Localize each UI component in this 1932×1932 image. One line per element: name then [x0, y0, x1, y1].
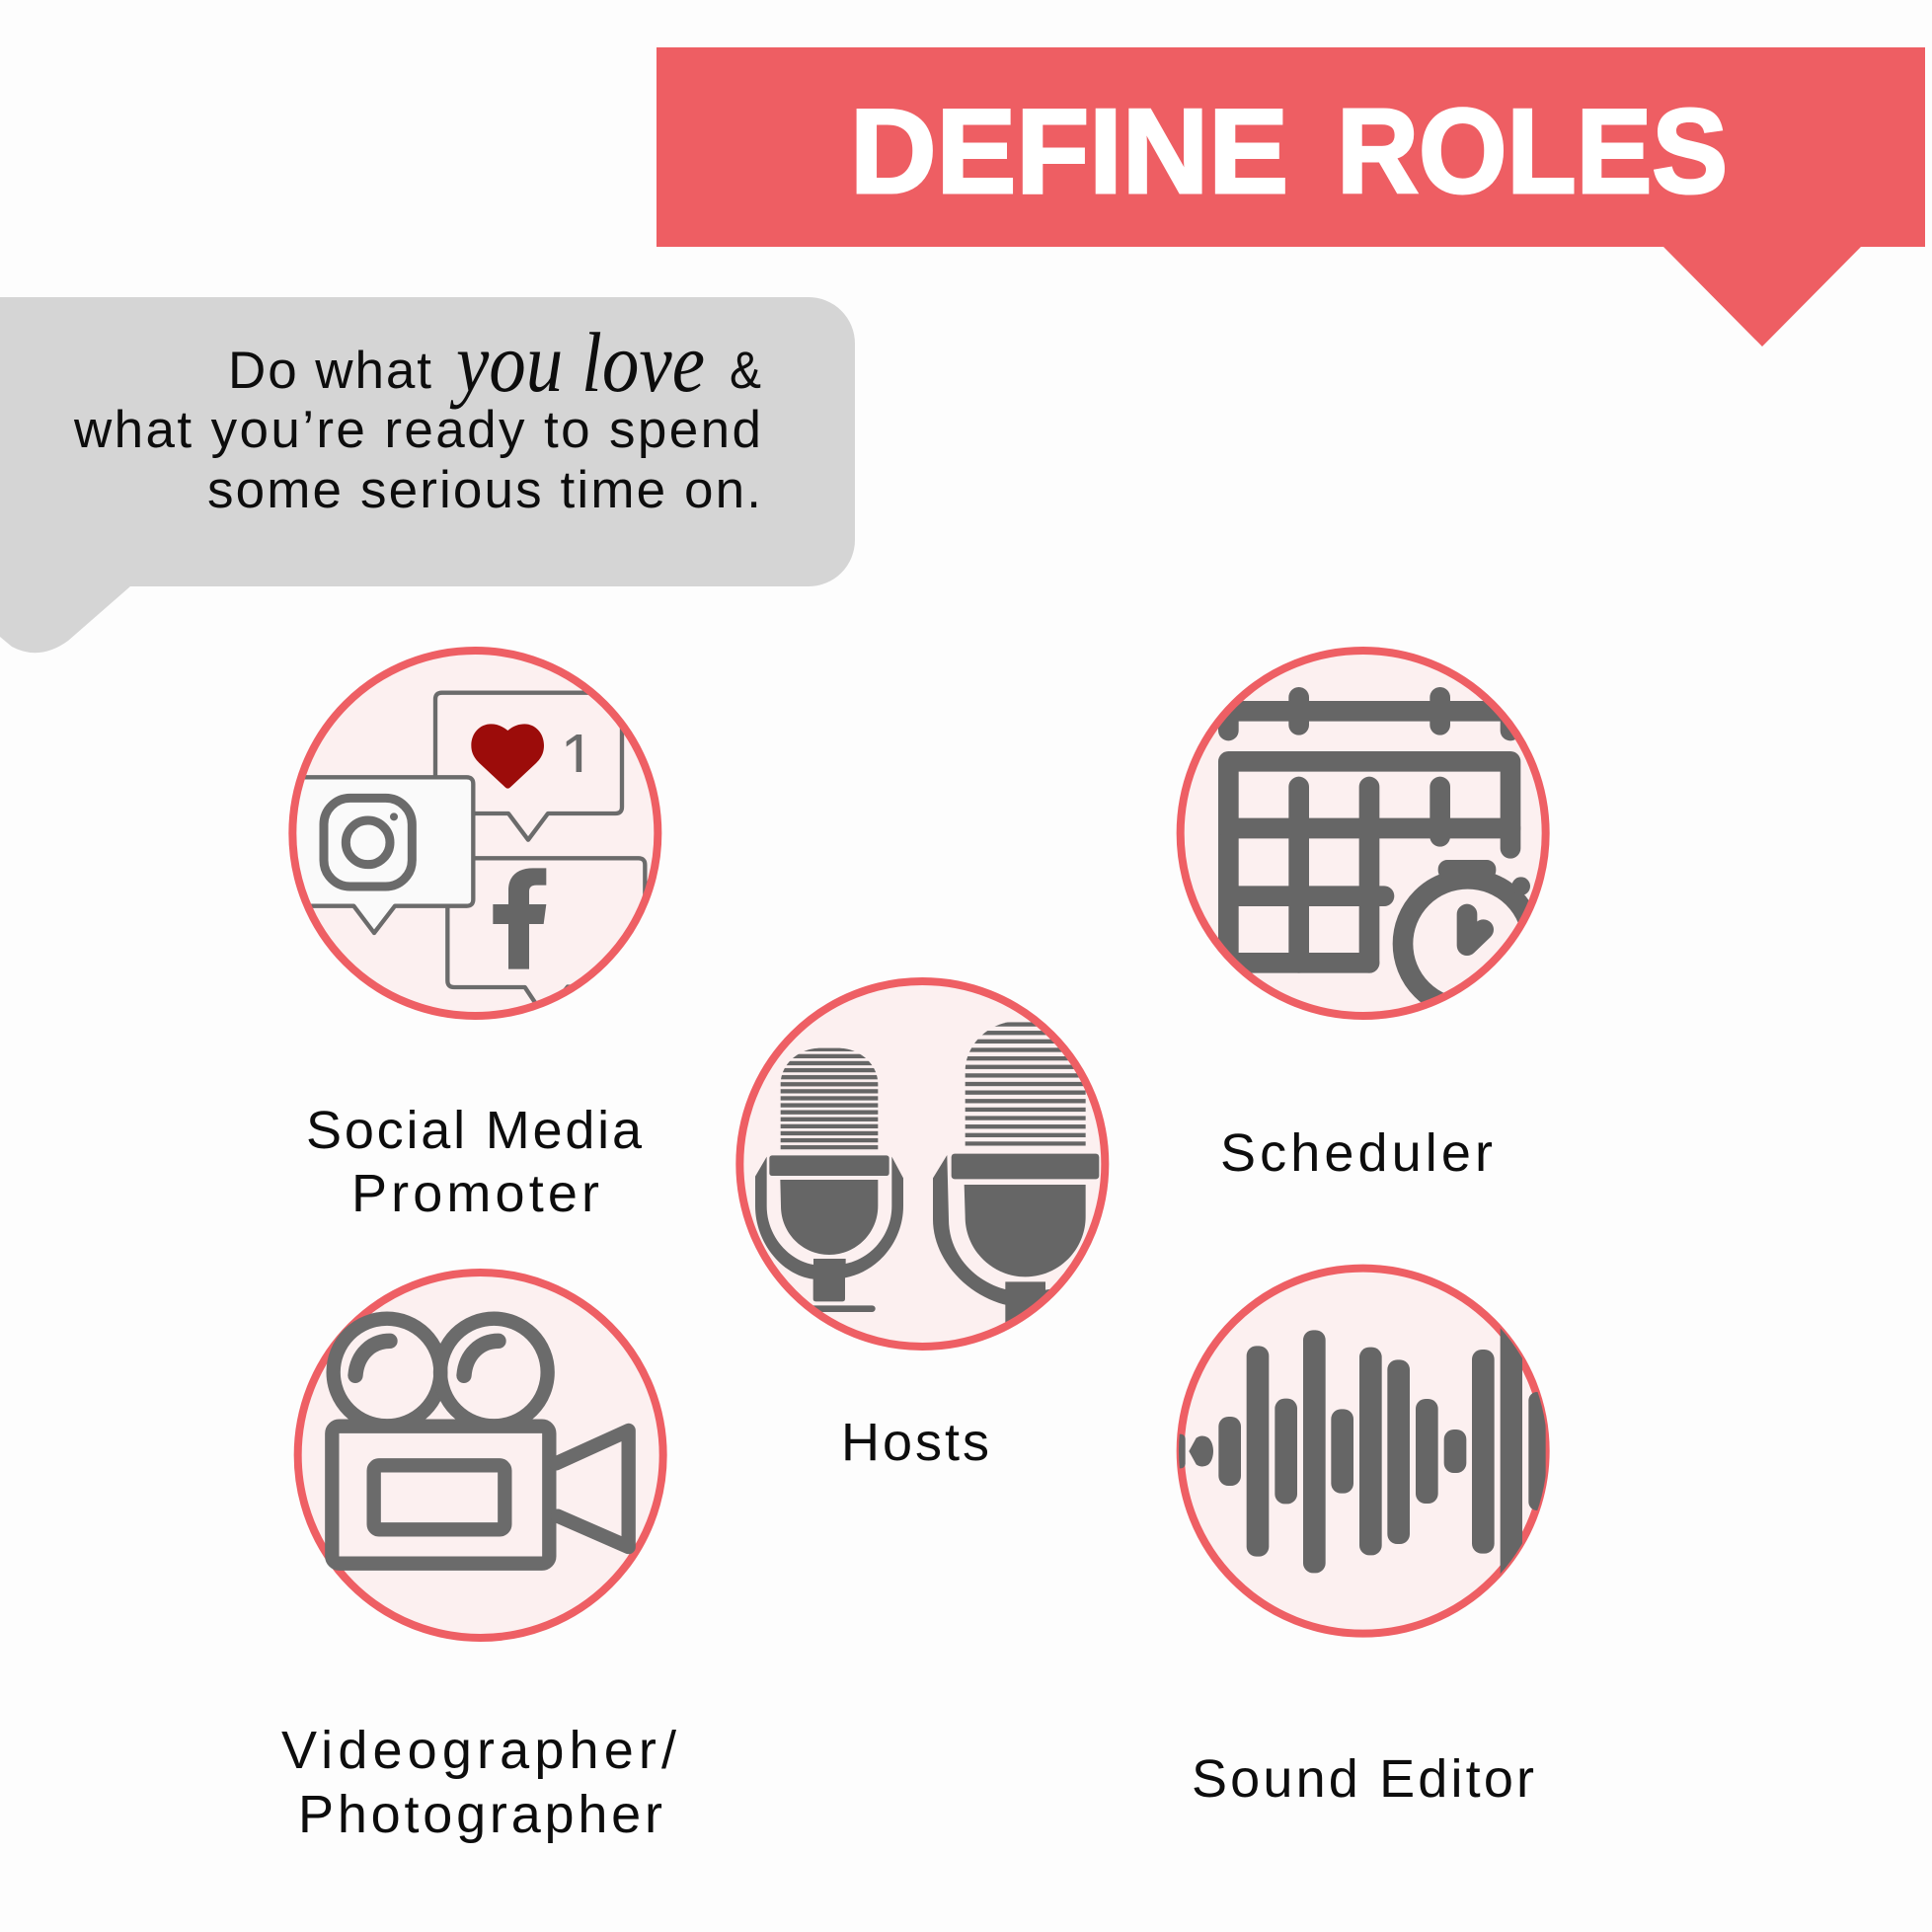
icon: sound wave — [1175, 1269, 1546, 1634]
quote text: what you’re ready to spend — [73, 401, 761, 459]
title: DEFINE — [850, 84, 1288, 218]
label: Hosts — [841, 1413, 989, 1472]
role: social media promoter — [279, 651, 657, 1223]
label: Videographer/ — [281, 1721, 676, 1780]
quote text: you love — [449, 315, 705, 410]
label: Photographer — [298, 1785, 662, 1844]
icon: calendar with stopwatch — [1181, 651, 1546, 1016]
role: scheduler — [1181, 651, 1546, 1183]
label — [281, 1721, 676, 1844]
icon: film camera — [298, 1273, 663, 1638]
quote text: Do what — [228, 342, 431, 400]
icon: two microphones — [739, 981, 1105, 1351]
role: hosts — [739, 981, 1105, 1472]
label: Sound Editor — [1192, 1749, 1534, 1809]
quote text — [73, 315, 761, 519]
title banner — [657, 47, 1925, 347]
title — [850, 84, 1728, 218]
title: ROLES — [1337, 84, 1728, 218]
label — [306, 1101, 643, 1223]
label: Promoter — [351, 1164, 599, 1223]
icon: social media bubbles: 1 — [561, 723, 595, 792]
quote text: some serious time on. — [207, 461, 761, 519]
speech bubble: intro quote — [0, 297, 855, 653]
role: sound editor — [1175, 1269, 1546, 1809]
icon: social media bubbles — [279, 651, 657, 1016]
role: videographer / photographer — [281, 1273, 676, 1844]
label: Social Media — [306, 1101, 643, 1160]
quote text: & — [730, 342, 761, 400]
label: Scheduler — [1220, 1123, 1493, 1183]
